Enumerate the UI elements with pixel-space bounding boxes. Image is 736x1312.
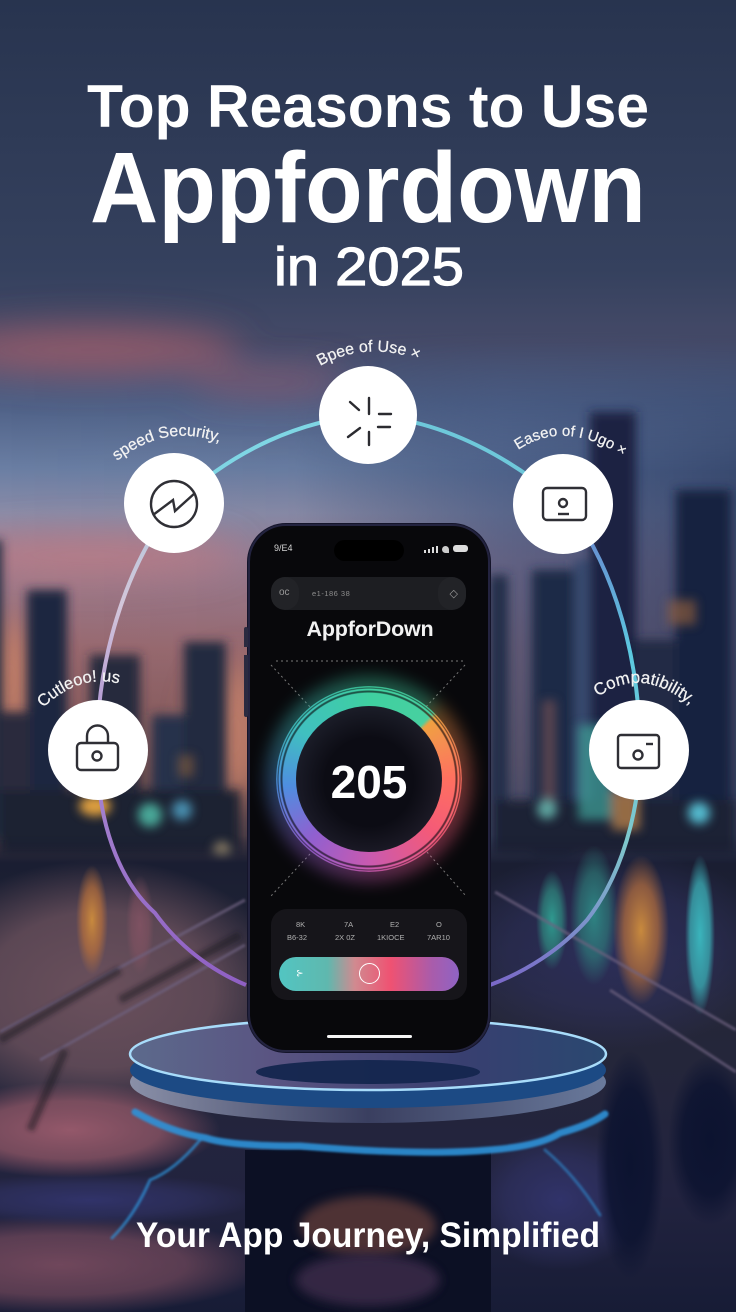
progress ring	[276, 686, 462, 872]
icon: speed lightning	[124, 453, 224, 553]
stat labels	[287, 920, 450, 942]
search pill: e1-186 38	[312, 589, 350, 598]
bottom stats card	[271, 909, 467, 1000]
search pill: oc	[279, 587, 290, 598]
icon: padlock	[48, 700, 148, 800]
stat labels: 7AR10	[427, 933, 450, 942]
label: speed security: speed Security,	[113, 426, 219, 460]
label: ease of use right: Easeo of I Ugo ×	[514, 426, 626, 454]
progress ring glow	[266, 676, 472, 882]
ring centre value: 205	[331, 756, 407, 808]
gradient slider	[279, 957, 459, 991]
home indicator	[327, 1035, 412, 1038]
icon: ease of use burst	[319, 366, 417, 464]
stat labels: B6-32	[287, 933, 307, 942]
phone mockup	[248, 524, 490, 1052]
dotted frame lines	[270, 660, 466, 896]
label: compatibility: Compatibility,	[594, 674, 693, 706]
dynamic island	[334, 540, 404, 561]
phone side buttons	[244, 627, 248, 717]
search pill	[271, 577, 466, 610]
label: ease of use top: Bpee of Use ×	[316, 340, 420, 366]
status bar signal, wifi and battery icons	[424, 545, 468, 553]
stat labels: 1KIOCE	[377, 933, 405, 942]
stat labels: E2	[390, 920, 399, 929]
title: Appfordown	[90, 132, 646, 244]
title: in 2025	[274, 237, 464, 297]
search pill: ◇	[450, 588, 458, 600]
icon: ease of use screen	[513, 454, 613, 554]
label: outlook us: Cutleoo! us	[38, 670, 120, 706]
stat labels: 2X 0Z	[335, 933, 355, 942]
ring inner glow	[296, 706, 442, 852]
status bar time: 9/E4	[274, 543, 293, 553]
stat labels: 7A	[344, 920, 353, 929]
stat labels: 8K	[296, 920, 305, 929]
title: Top Reasons to Use	[87, 73, 649, 140]
gradient slider: ⊱	[296, 968, 304, 978]
tagline: Your App Journey, Simplified	[136, 1216, 600, 1255]
icon: compatibility window	[589, 700, 689, 800]
app name: AppforDown	[307, 617, 433, 641]
stat labels: O	[436, 920, 442, 929]
